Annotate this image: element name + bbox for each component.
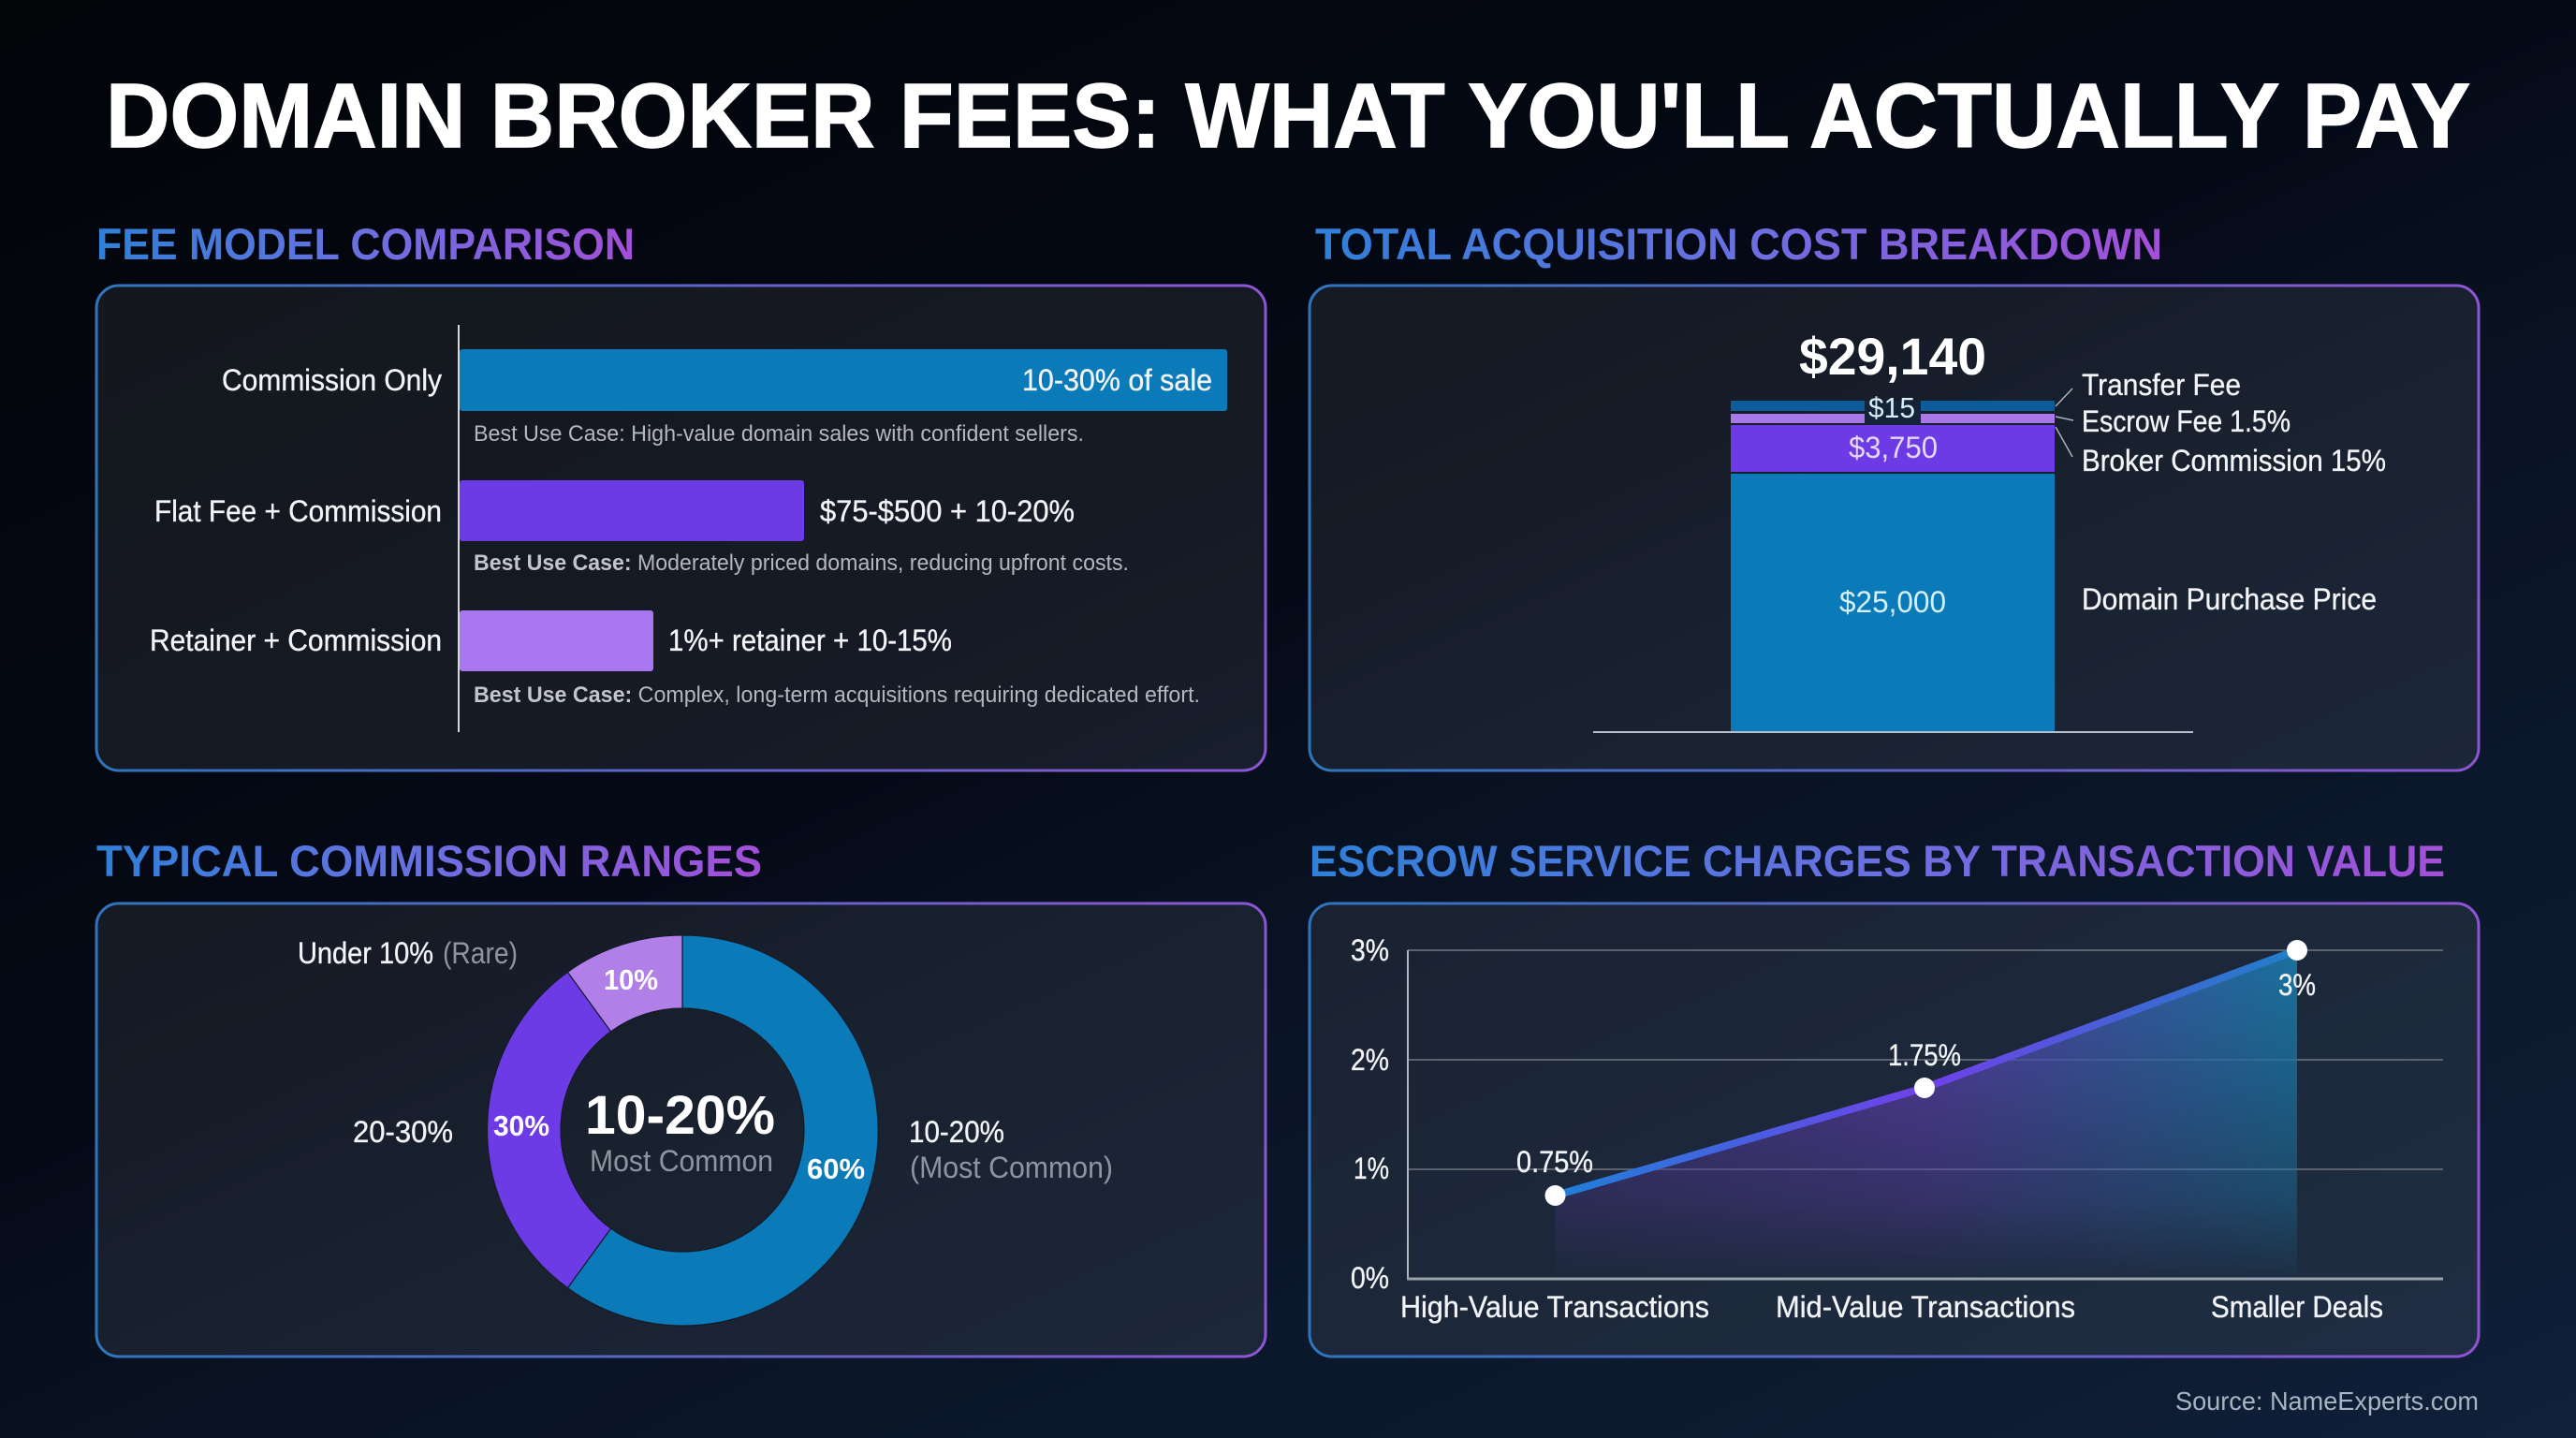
stacked bar: $3,750 [1849, 431, 1938, 464]
donut legend labels: 10-20% [909, 1115, 1004, 1149]
donut centre label: Most Common [590, 1144, 773, 1178]
stacked bar [1731, 391, 2055, 731]
y axis labels: 0% [1351, 1261, 1389, 1295]
leader lines [2056, 389, 2073, 457]
row: retainer + commission: Best Use Case: Complex, long-term acquisitions requiring dedicated effort. [474, 682, 1200, 708]
donut centre label [585, 1085, 775, 1178]
x axis labels: Mid-Value Transactions [1776, 1290, 2075, 1324]
donut legend labels: Under 10% [298, 936, 433, 970]
heading: escrow service charges: ESCROW SERVICE CHARGES BY TRANSACTION VALUE [1310, 836, 2445, 886]
row: flat fee + commission: Best Use Case: Moderately priced domains, reducing upfront costs. [474, 550, 1129, 576]
y axis labels [1351, 933, 1389, 1295]
row: commission only: Commission Only [222, 363, 442, 397]
data points [1544, 940, 2307, 1206]
data labels [1516, 968, 2316, 1179]
row: flat fee + commission [154, 480, 1129, 576]
heading: typical commission ranges: TYPICAL COMMISSION RANGES [96, 836, 762, 886]
row: retainer + commission: Retainer + Commission [150, 624, 442, 657]
row: flat fee + commission: $75-$500 + 10-20% [820, 494, 1075, 528]
donut centre label: 10-20% [585, 1085, 775, 1146]
legend labels [2082, 368, 2386, 616]
legend labels: Escrow Fee 1.5% [2082, 404, 2291, 438]
y axis labels: 2% [1351, 1043, 1389, 1077]
x axis labels: Smaller Deals [2211, 1290, 2383, 1324]
legend labels: Transfer Fee [2082, 368, 2241, 402]
panel: typical commission ranges [96, 903, 1266, 1357]
row: flat fee + commission: Flat Fee + Commission [154, 494, 442, 528]
row: commission only: Best Use Case: High-value domain sales with confident sellers. [474, 421, 1084, 447]
total value: $29,140 [1799, 327, 1986, 386]
area chart fill [1556, 950, 2297, 1279]
y axis labels: 3% [1351, 933, 1389, 967]
data labels: 0.75% [1516, 1145, 1593, 1179]
row: retainer + commission: 1%+ retainer + 10-15% [668, 624, 952, 657]
panel: escrow service charges [1310, 903, 2479, 1357]
panel: fee model comparison [96, 286, 1266, 770]
donut legend labels: (Most Common) [910, 1151, 1113, 1184]
row: commission only: 10-30% of sale [1022, 363, 1212, 397]
donut percentages: 10% [604, 963, 658, 996]
x axis labels [1400, 1290, 2383, 1324]
legend labels: Broker Commission 15% [2082, 444, 2386, 477]
trend line [1556, 950, 2297, 1196]
donut percentages: 60% [807, 1152, 865, 1185]
legend labels: Domain Purchase Price [2082, 582, 2377, 616]
stacked bar: $25,000 [1839, 585, 1946, 619]
donut percentages: 30% [493, 1109, 549, 1142]
panel: total acquisition cost breakdown [1310, 286, 2479, 770]
title: DOMAIN BROKER FEES: WHAT YOU'LL ACTUALLY PAY [106, 65, 2470, 167]
data labels: 1.75% [1888, 1038, 1961, 1072]
donut legend labels [298, 936, 1113, 1184]
y axis labels: 1% [1354, 1152, 1389, 1185]
row: retainer + commission [150, 610, 1200, 708]
donut legend labels: (Rare) [443, 936, 518, 970]
source note: Source: NameExperts.com [2175, 1387, 2479, 1416]
x axis labels: High-Value Transactions [1400, 1290, 1709, 1324]
heading: fee model comparison: FEE MODEL COMPARISON [96, 219, 635, 269]
row: commission only [222, 349, 1227, 447]
donut legend labels: 20-30% [353, 1115, 453, 1149]
donut percentages [493, 963, 865, 1185]
heading: total acquisition cost breakdown: TOTAL ACQUISITION COST BREAKDOWN [1315, 219, 2162, 269]
data labels: 3% [2278, 968, 2316, 1002]
donut chart [487, 935, 878, 1326]
stacked bar: $15 [1868, 391, 1915, 424]
